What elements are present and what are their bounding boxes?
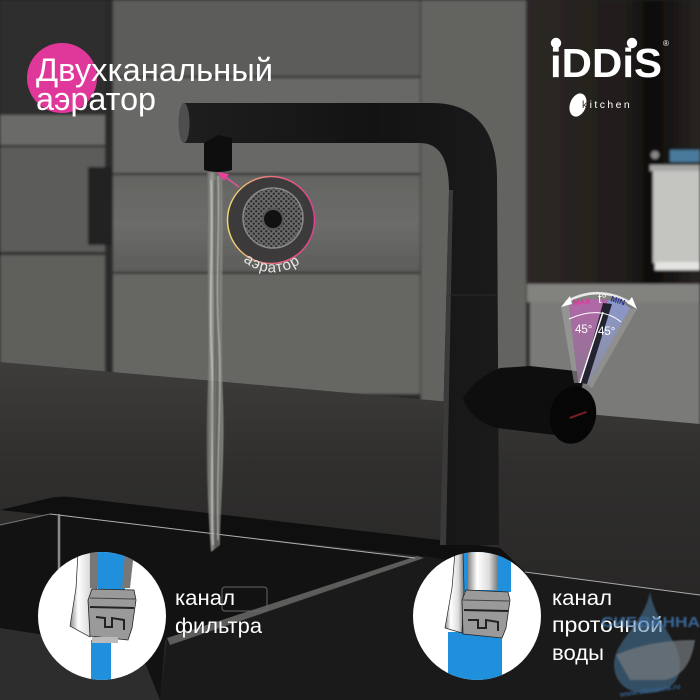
- label: flow channel: канал: [552, 586, 612, 610]
- aerator callout: [217, 172, 316, 274]
- labels: MAX: [573, 297, 592, 307]
- nozzle: [204, 135, 232, 172]
- water stream: [207, 172, 223, 552]
- temperature fan diagram: [561, 291, 637, 388]
- logo: [550, 38, 669, 119]
- chrome sleeve: [70, 552, 97, 637]
- lower blue: [448, 632, 502, 682]
- faucet: [178, 103, 602, 545]
- upper blue: [98, 552, 125, 590]
- temperature fan diagram: t°: [598, 291, 607, 306]
- label: filter channel: [175, 586, 262, 638]
- title: аэратор: [36, 81, 156, 117]
- aerator label: аэратор: [244, 256, 299, 274]
- chrome sleeve: [445, 552, 464, 633]
- label: filter channel: канал: [175, 586, 235, 610]
- center lever: [581, 303, 612, 384]
- watermark url: www.sibvanna.ru: [618, 681, 681, 699]
- fan sectors: [561, 305, 578, 383]
- label: flow channel: воды: [552, 641, 604, 665]
- temperature fan diagram: 45°: [598, 326, 615, 338]
- center tube: [468, 552, 498, 590]
- cartridge: [462, 590, 510, 638]
- faucet body and spout: [184, 103, 499, 545]
- mesh: [243, 188, 303, 248]
- arrow: [224, 176, 239, 187]
- title: Двухканальный: [36, 52, 273, 88]
- central hole: [263, 209, 283, 229]
- logo dots: [551, 38, 637, 48]
- drop: [614, 592, 680, 693]
- brand name: iDDiS: [550, 40, 662, 86]
- arrows: [566, 293, 634, 305]
- watermark name: СИБВАННА: [601, 614, 700, 631]
- circle: filter channel: [38, 552, 166, 682]
- lower blue: [91, 640, 111, 682]
- handle: [463, 366, 585, 437]
- spout end cap: [178, 103, 190, 143]
- tub: [616, 640, 695, 680]
- label: filter channel: фильтра: [175, 614, 262, 638]
- kitchen blob: [566, 91, 590, 119]
- handle knob: [544, 382, 602, 448]
- title: [36, 52, 273, 117]
- cartridge: [88, 589, 136, 640]
- aerator disc: [228, 176, 314, 264]
- label: flow channel: проточной: [552, 613, 663, 637]
- watermark: [601, 592, 700, 699]
- countertop: [0, 362, 700, 700]
- pink circle: [27, 43, 97, 113]
- temperature fan diagram: MIN: [609, 294, 626, 308]
- temperature fan diagram: 45°: [575, 324, 592, 336]
- label: flow channel: [552, 586, 663, 665]
- circle: flow channel: [413, 552, 541, 682]
- registered mark: ®: [663, 39, 669, 48]
- upper blue: [463, 552, 511, 592]
- center white line: [580, 312, 603, 383]
- kitchen word: kitchen: [582, 99, 632, 111]
